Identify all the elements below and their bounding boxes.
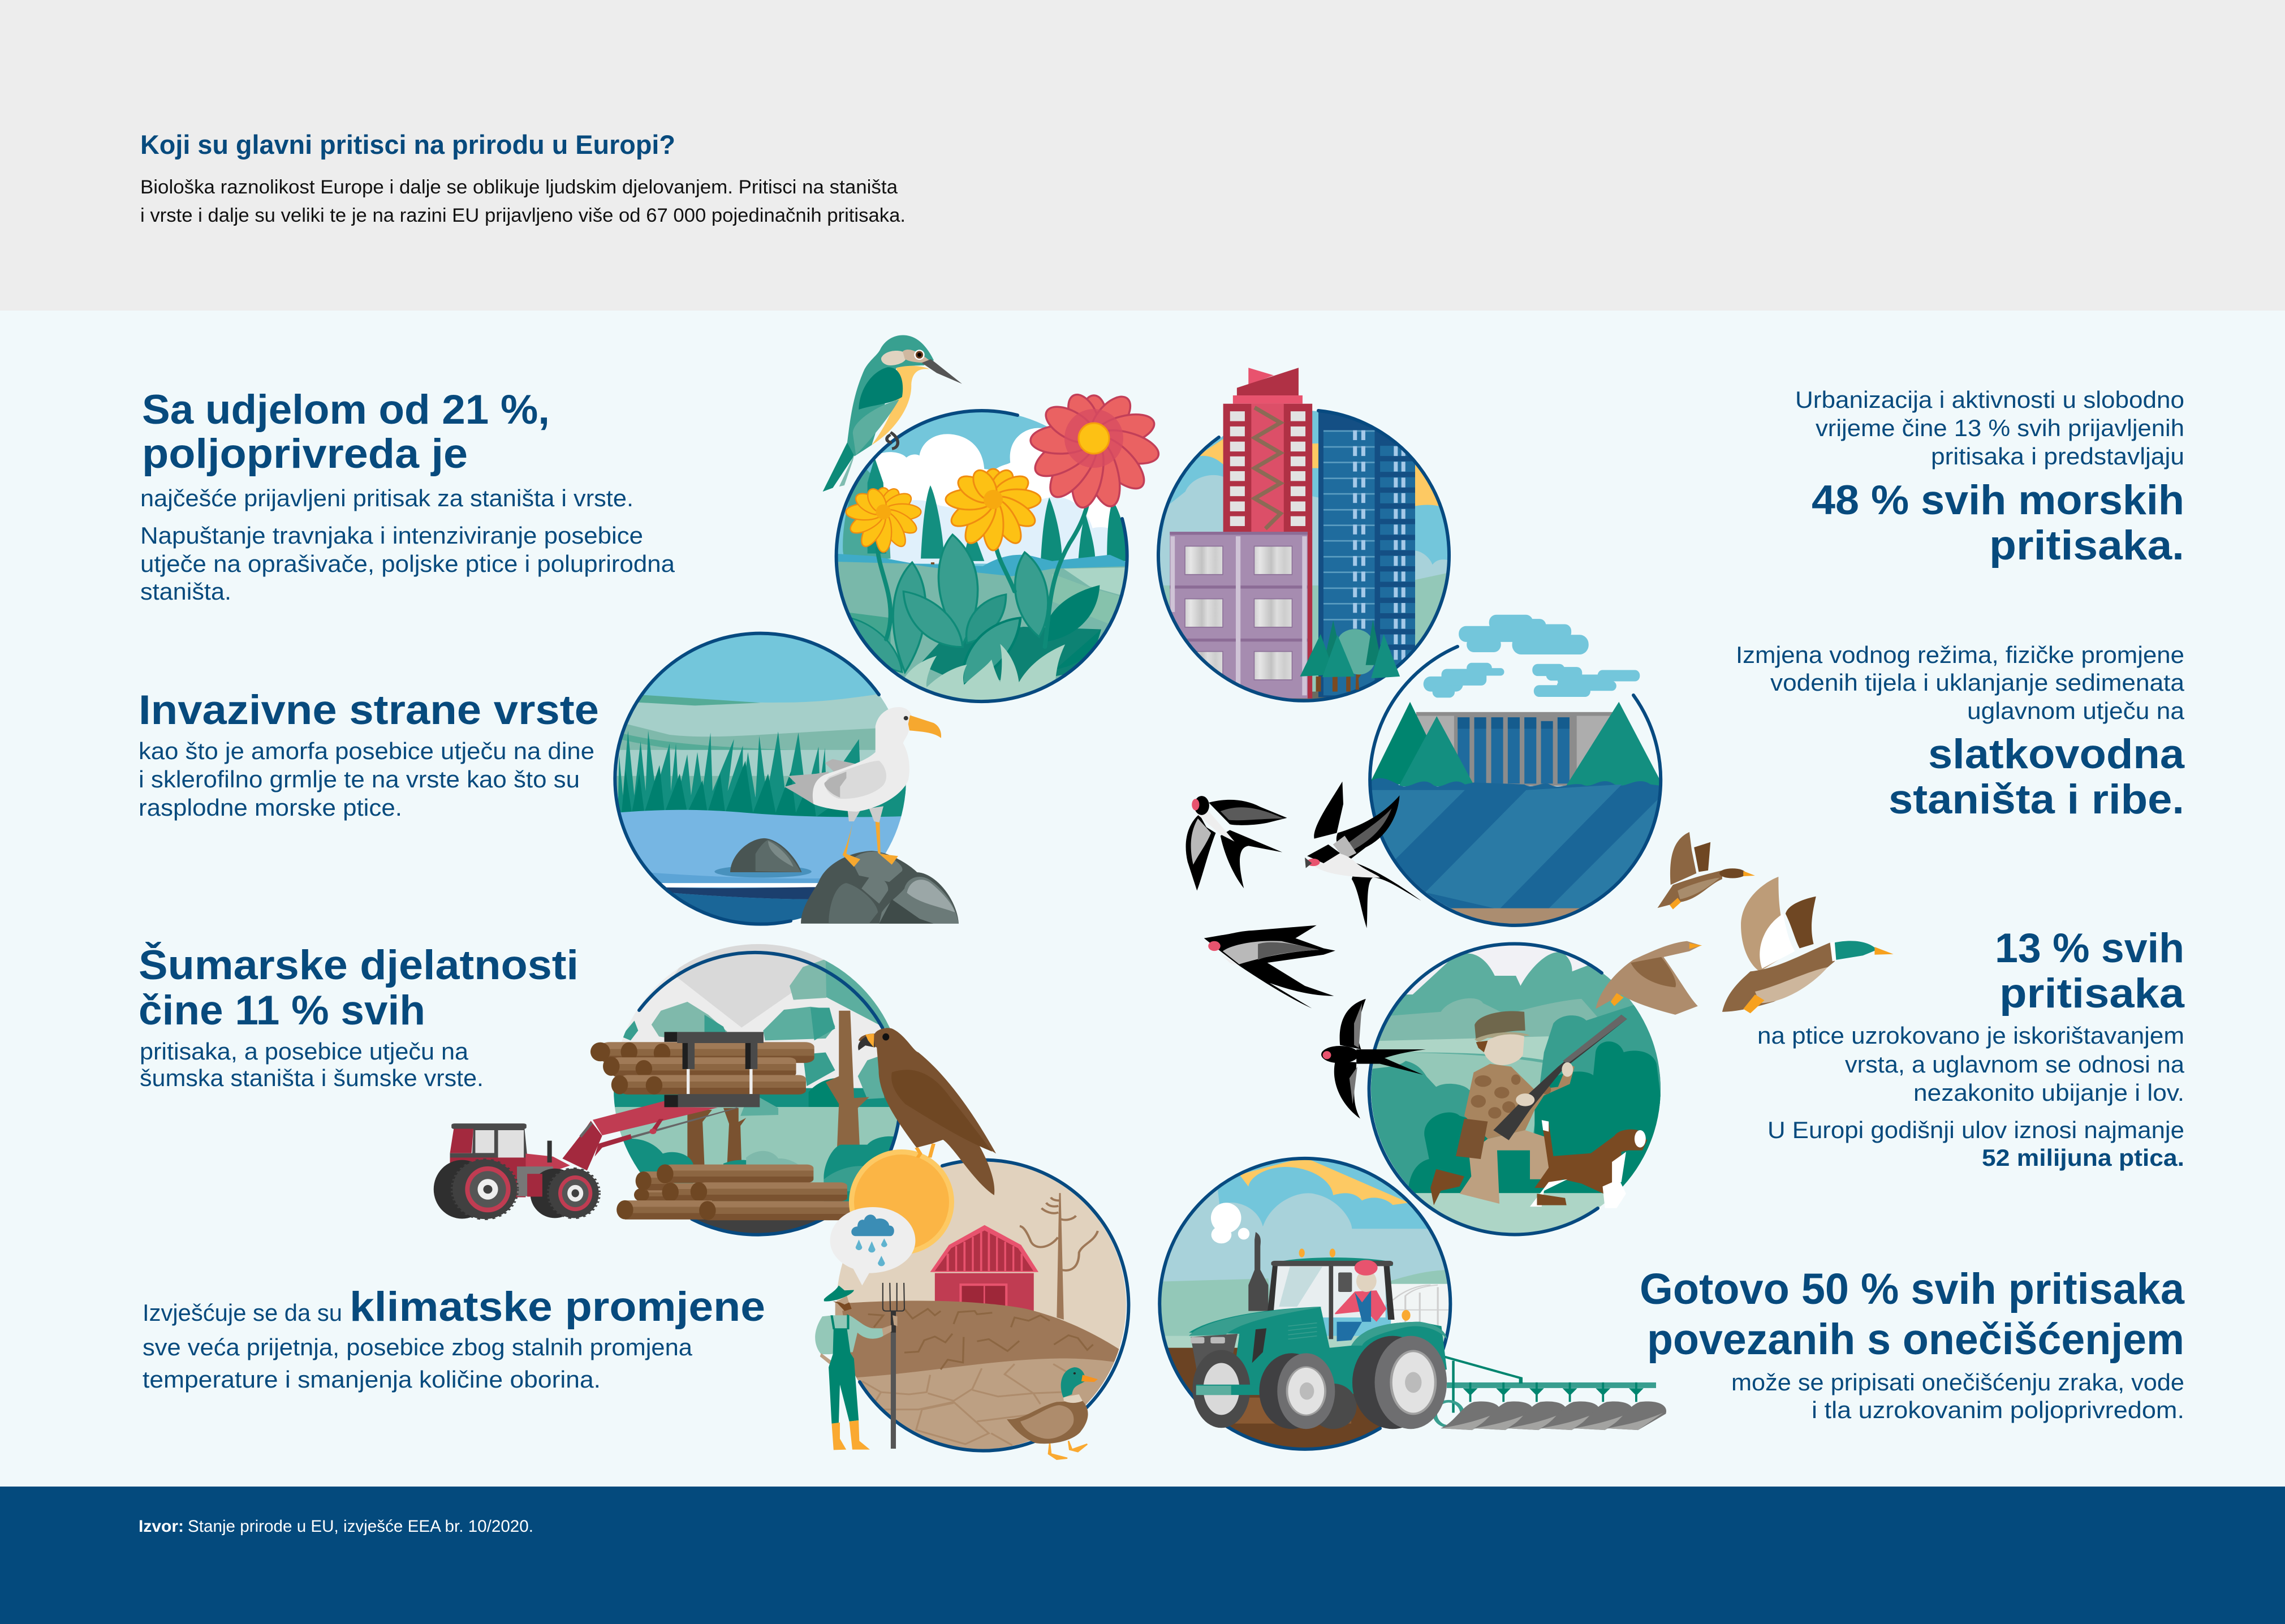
text block: hunting: 13 % svih <box>1995 925 2184 971</box>
text block: agriculture: staništa. <box>140 578 231 605</box>
title: Koji su glavni pritisci na prirodu u Europi? <box>140 130 675 160</box>
icon: sun <box>849 1149 954 1255</box>
text block: forestry: pritisaka, a posebice utječu na <box>140 1038 469 1065</box>
source note: Stanje prirode u EU, izvješće EEA br. 10/2020. <box>188 1517 533 1536</box>
footer band <box>0 1487 2285 1624</box>
text block: freshwater: Izmjena vodnog režima, fizičke promjene <box>1736 641 2184 668</box>
icon: mallard in flight <box>1722 877 1894 1013</box>
icon: hunter with dog <box>1430 1011 1647 1208</box>
icon: swallow 4 <box>1321 999 1426 1119</box>
text block: urbanisation: Urbanizacija i aktivnosti u slobodno <box>1795 386 2184 413</box>
icon: barn <box>930 1225 1038 1316</box>
illustration: urban circle with towers <box>1153 368 1459 710</box>
icon: yellow flower large <box>946 466 1041 550</box>
text block: freshwater: slatkovodna <box>1928 731 2185 777</box>
text block: forestry <box>139 942 579 1091</box>
icon: red tower <box>1223 368 1312 532</box>
illustration: agriculture circle with flowers <box>821 335 1162 720</box>
text block: invasive species: i sklerofilno grmlje te na vrste kao što su <box>139 766 580 792</box>
illustration: drought circle <box>815 1149 1136 1459</box>
text block: forestry: čine 11 % svih <box>139 988 425 1033</box>
icon: swallow 2 <box>1305 782 1421 928</box>
callout: rain bubble <box>830 1207 915 1285</box>
illustration: forest circle with logging tractor <box>434 933 954 1251</box>
text block: hunting: vrsta, a uglavnom se odnosi na <box>1845 1051 2185 1078</box>
text block: hunting <box>1757 925 2185 1171</box>
icon: kingfisher <box>823 335 962 492</box>
text block: climate change: klimatske promjene <box>350 1284 765 1330</box>
text block: urbanisation: pritisaka i predstavljaju <box>1931 443 2184 469</box>
icon: rocks <box>801 851 959 924</box>
icon: swallow 1 <box>1186 796 1287 890</box>
text block: freshwater: uglavnom utječu na <box>1967 697 2185 724</box>
text block: climate change <box>143 1284 765 1393</box>
text block: hunting: 52 milijuna ptica. <box>1982 1144 2184 1171</box>
icon: female duck in flight <box>1596 941 1702 1015</box>
text block: agriculture: poljoprivreda je <box>142 431 468 477</box>
text block: agriculture: najčešće prijavljeni pritisak za staništa i vrste. <box>140 485 633 511</box>
text block: invasive species: Invazivne strane vrste <box>139 687 599 733</box>
text block: urbanisation: vrijeme čine 13 % svih prijavljenih <box>1816 415 2184 441</box>
text block: forestry: šumska staništa i šumske vrste. <box>140 1065 484 1091</box>
illustration: wetland circle with gull <box>613 631 959 926</box>
text block: forestry: Šumarske djelatnosti <box>139 942 579 988</box>
text block: agriculture: Napuštanje travnjaka i intenziviranje posebice <box>140 522 643 549</box>
icon: dead tree <box>1020 1193 1098 1320</box>
icon: trees by towers <box>1300 619 1400 692</box>
text block: climate change: temperature i smanjenja količine oborina. <box>143 1366 601 1393</box>
text block: freshwater: staništa i ribe. <box>1889 777 2184 822</box>
icon: logging tractor <box>434 1121 632 1219</box>
icon: small duck in flight <box>1658 832 1755 910</box>
intro text <box>140 176 906 226</box>
text block: climate change: sve veća prijetnja, posebice zbog stalnih promjena <box>143 1334 693 1360</box>
icon: upper log stack <box>590 1032 814 1139</box>
icon: eagle <box>858 1028 996 1195</box>
text block: agriculture: utječe na oprašivače, poljske ptice i poluprirodna <box>140 550 675 577</box>
text block: urbanisation: pritisaka. <box>1989 523 2184 568</box>
text block: invasive species <box>139 687 599 821</box>
text block: invasive species: kao što je amorfa posebice utječu na dine <box>139 738 594 764</box>
text block: hunting: U Europi godišnji ulov iznosi najmanje <box>1767 1117 2184 1143</box>
icon: red flower <box>1029 390 1162 510</box>
header band <box>0 0 2285 311</box>
icon: mallard on ground <box>1007 1367 1098 1459</box>
text block: agriculture: Sa udjelom od 21 %, <box>142 387 550 433</box>
icon: green tractor <box>1189 1232 1447 1429</box>
text block: agriculture <box>140 387 675 605</box>
text block: urbanisation <box>1795 386 2184 568</box>
icon: lower log stack <box>616 1164 851 1220</box>
text block: freshwater <box>1736 641 2185 822</box>
text block: hunting: nezakonito ubijanje i lov. <box>1913 1079 2184 1106</box>
text block: pollution: povezanih s onečišćenjem <box>1647 1315 2184 1364</box>
icon: flower stems <box>878 478 1091 647</box>
source note: Izvor: <box>139 1517 184 1536</box>
icon: clouds above dam <box>1424 615 1640 697</box>
illustration: hunting circle <box>1368 942 1661 1237</box>
text block: pollution <box>1640 1265 2185 1423</box>
icon: gull <box>784 707 941 867</box>
intro text: i vrste i dalje su veliki te je na razini EU prijavljeno više od 67 000 pojedinačnih pritisaka. <box>140 205 906 226</box>
icon: yellow flower small <box>846 486 921 552</box>
text block: hunting: na ptice uzrokovano je iskorištavanjem <box>1757 1022 2184 1049</box>
text block: urbanisation: 48 % svih morskih <box>1812 477 2184 523</box>
icon: swallow 3 <box>1204 925 1335 1009</box>
icon: farmer with fork <box>815 1283 904 1450</box>
intro text: Biološka raznolikost Europe i dalje se oblikuje ljudskim djelovanjem. Pritisci na staništa <box>140 176 898 198</box>
text block: freshwater: vodenih tijela i uklanjanje sedimenata <box>1770 669 2185 696</box>
illustration: dam circle <box>1366 615 1665 931</box>
text block: climate change: Izvješćuje se da su <box>143 1299 342 1326</box>
illustration: pollution circle with tractor <box>1153 1153 1666 1456</box>
text block: pollution: Gotovo 50 % svih pritisaka <box>1640 1265 2185 1313</box>
text block: invasive species: rasplodne morske ptice. <box>139 794 402 821</box>
icon: plough <box>1435 1356 1666 1430</box>
text block: hunting: pritisaka <box>1999 971 2185 1016</box>
text block: pollution: i tla uzrokovanim poljoprivredom. <box>1812 1397 2184 1423</box>
text block: pollution: može se pripisati onečišćenju zraka, vode <box>1731 1369 2184 1395</box>
